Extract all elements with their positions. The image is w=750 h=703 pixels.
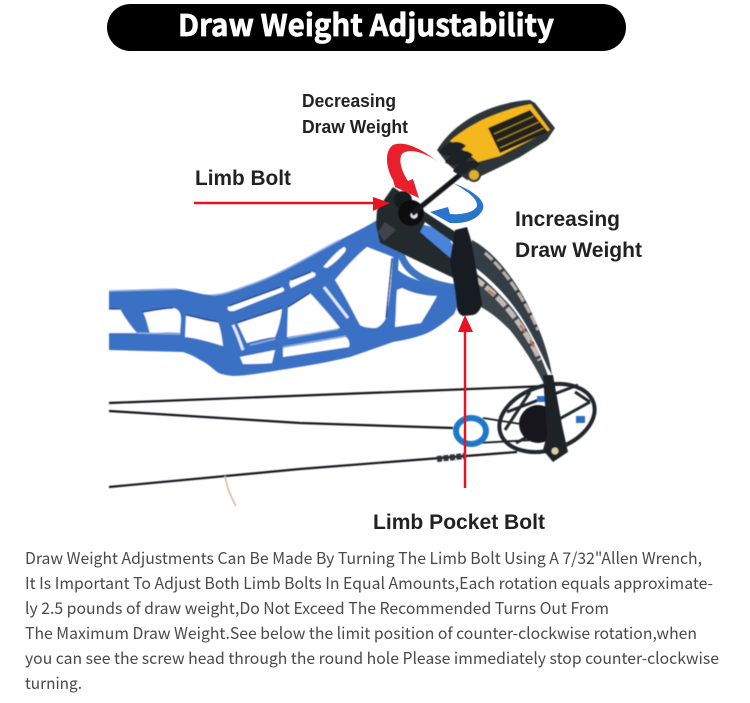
label: increasing draw weight: Draw Weight bbox=[515, 238, 642, 262]
title banner: Draw Weight Adjustability bbox=[178, 1, 554, 45]
arrow nock thread bbox=[225, 476, 236, 506]
limb bbox=[468, 240, 553, 390]
label: limb bolt: Limb Bolt bbox=[195, 167, 291, 190]
cam bbox=[491, 372, 603, 464]
label: increasing draw weight: Increasing bbox=[515, 207, 620, 231]
blue rotation arrow: increasing bbox=[430, 183, 483, 223]
blue ring behind pocket bbox=[400, 224, 458, 288]
limb: upper blade bbox=[468, 240, 552, 375]
description text: Draw Weight Adjustments Can Be Made By Turning The Limb Bolt Using A 7/32"Allen Wrench, bbox=[25, 545, 702, 569]
riser bbox=[109, 220, 460, 376]
label: decreasing draw weight bbox=[302, 91, 408, 137]
description text bbox=[25, 545, 719, 694]
title banner bbox=[107, 1, 626, 51]
description text: you can see the screw head through the round hole Please immediately stop counter-clockwise bbox=[25, 645, 719, 669]
hex wrench tool bbox=[412, 100, 555, 214]
description text: The Maximum Draw Weight.See below the limit position of counter-clockwise rotation,when bbox=[25, 620, 697, 644]
riser cut-outs bbox=[109, 247, 437, 364]
red rotation arrow: decreasing bbox=[387, 144, 437, 198]
label: decreasing draw weight: Draw Weight bbox=[302, 117, 408, 137]
limb bolt bbox=[394, 191, 424, 226]
blue peep ring bbox=[456, 418, 486, 444]
strings bbox=[109, 386, 547, 487]
arrow: limb bolt bbox=[194, 197, 390, 211]
arrow: limb pocket bolt bbox=[458, 315, 473, 488]
label: limb pocket bolt: Limb Pocket Bolt bbox=[373, 511, 545, 534]
label: increasing draw weight bbox=[515, 207, 642, 262]
pocket plate bbox=[450, 227, 482, 316]
description text: It Is Important To Adjust Both Limb Bolts In Equal Amounts,Each rotation equals approximate- bbox=[25, 570, 713, 594]
limb tip bbox=[543, 375, 568, 462]
nocking point bbox=[437, 456, 465, 459]
limb: lower blade bbox=[468, 268, 553, 390]
label: decreasing draw weight: Decreasing bbox=[302, 91, 396, 111]
description text: ly 2.5 pounds of draw weight,Do Not Exceed The Recommended Turns Out From bbox=[25, 595, 609, 619]
limb pocket bbox=[376, 187, 482, 316]
bow diagram bbox=[109, 100, 603, 506]
description text: turning. bbox=[25, 670, 82, 694]
